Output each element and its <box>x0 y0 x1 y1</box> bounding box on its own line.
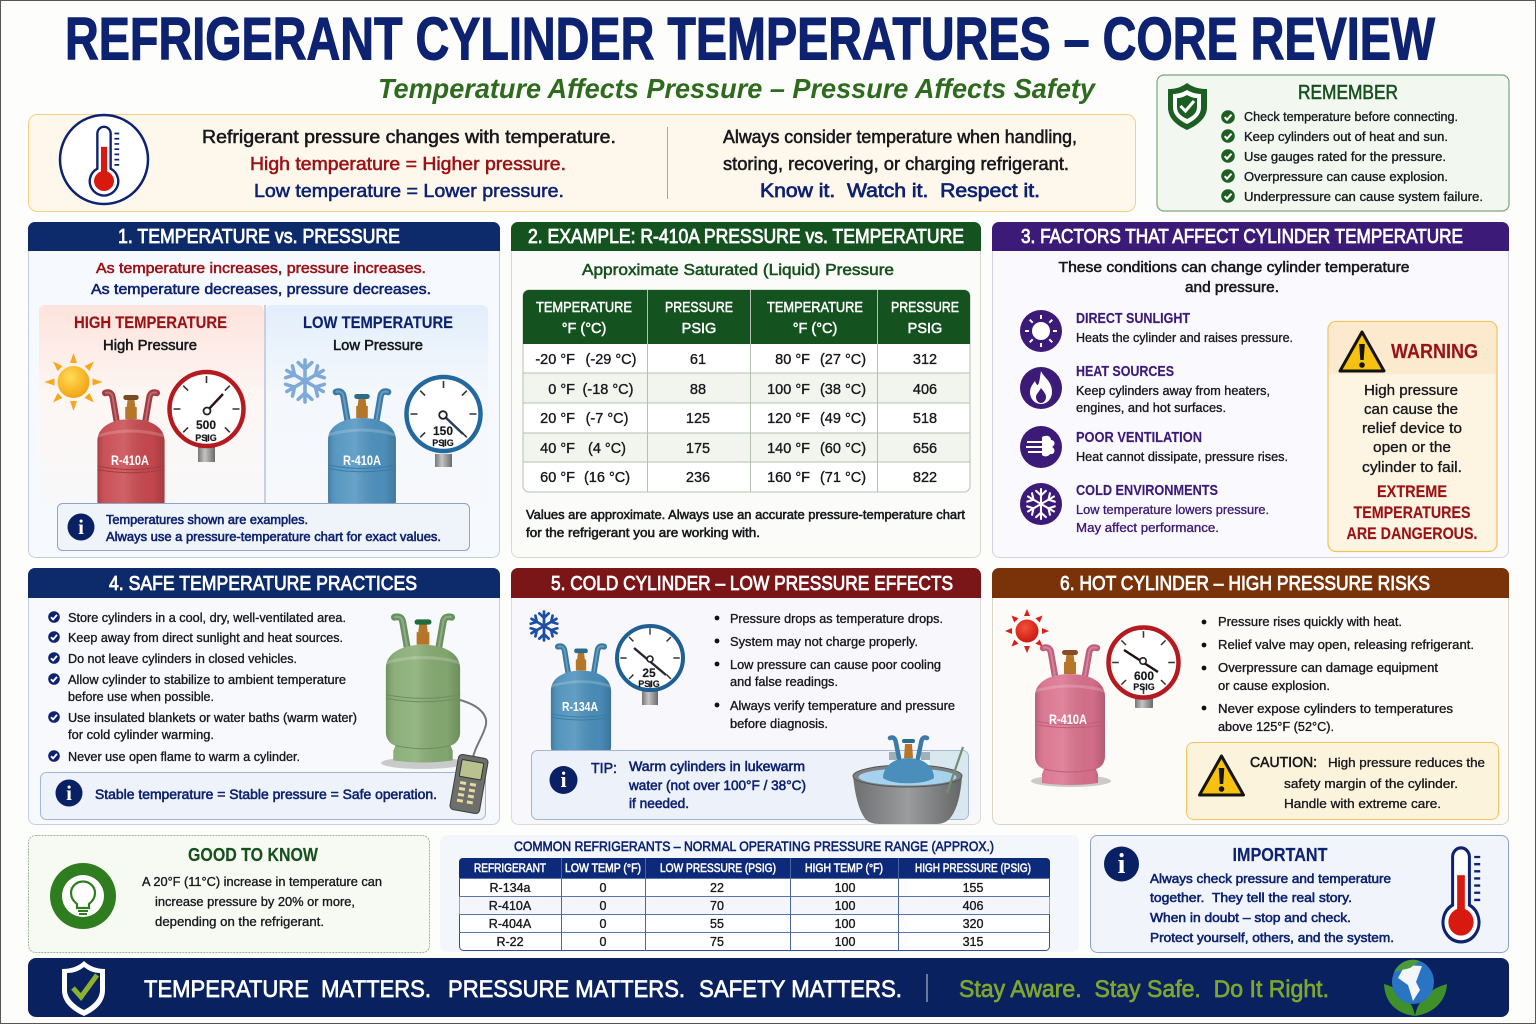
cylinder: red R-410A: R-410A <box>111 452 149 468</box>
cold bullet list: Pressure drops as temperature drops. <box>730 611 943 626</box>
pressure temperature table: 236 <box>686 470 710 486</box>
cold bullet list: before diagnosis. <box>730 716 828 731</box>
practices checklist: Do not leave cylinders in closed vehicles. <box>68 651 297 666</box>
refrigerants table: 0 <box>600 935 607 949</box>
pressure temperature table: TEMPERATURE <box>536 300 632 316</box>
pressure temperature table: (38 °C) <box>820 382 866 398</box>
factor: heat sources: engines, and hot surfaces. <box>1076 400 1226 415</box>
pressure temperature table: (49 °C) <box>820 411 866 427</box>
table footnote <box>526 507 965 540</box>
note: examples: Always use a pressure-temperature chart for exact values. <box>106 530 441 544</box>
callout: warning: EXTREME <box>1377 483 1447 501</box>
pressure temperature table: 40 °F <box>540 441 575 457</box>
pressure temperature table: (27 °C) <box>820 352 866 368</box>
refrigerants table: 406 <box>963 899 983 913</box>
header: panel 6: 6. HOT CYLINDER – HIGH PRESSURE RISKS <box>1060 573 1430 595</box>
callout: warning <box>1328 322 1497 552</box>
icon: warning triangle <box>1340 332 1384 371</box>
refrigerants table: 0 <box>600 899 607 913</box>
intro right text: Know it. Watch it. Respect it. <box>760 181 1040 202</box>
low temperature column: LOW TEMPERATURE <box>303 313 453 332</box>
panel: common refrigerants table <box>440 835 1079 952</box>
cylinder: blue R-134A: R-134A <box>562 699 598 714</box>
refrigerants table: 315 <box>963 935 983 949</box>
refrigerants table: REFRIGERANT <box>474 863 546 875</box>
intro left text: Refrigerant pressure changes with temperature. <box>202 127 616 147</box>
pressure temperature table: (71 °C) <box>820 470 866 486</box>
panel 3 intro: and pressure. <box>1185 279 1279 296</box>
refrigerants table: HIGH TEMP (°F) <box>805 863 883 875</box>
pressure temperature table: 140 °F <box>767 441 810 457</box>
intro left text <box>202 127 616 201</box>
pressure temperature table: 61 <box>690 352 706 368</box>
callout: caution: CAUTION: <box>1250 755 1317 771</box>
cylinder: pink R-410A: R-410A <box>1049 711 1087 727</box>
banner: footer <box>28 958 1509 1017</box>
refrigerants table: R-404A <box>489 917 532 931</box>
panel: 6 hot cylinder <box>992 568 1509 824</box>
refrigerants table: LOW PRESSURE (PSIG) <box>660 863 776 875</box>
pressure temperature table: (-7 °C) <box>586 411 628 427</box>
icon: red sun <box>1005 609 1049 653</box>
panel: 1 temperature vs pressure <box>28 222 500 558</box>
gauge: 25 PSIG: PSIG <box>638 679 660 689</box>
pressure temperature table: 822 <box>913 470 937 486</box>
intro right text: storing, recovering, or charging refrigerant. <box>723 154 1069 174</box>
pressure temperature table: (4 °C) <box>588 441 626 457</box>
tip box: Warm cylinders in lukewarm <box>629 759 805 774</box>
tip box: i <box>560 767 567 792</box>
high temperature column: HIGH TEMPERATURE <box>74 313 227 332</box>
cold bullet list: Always verify temperature and pressure <box>730 698 955 713</box>
remember checklist: Use gauges rated for the pressure. <box>1244 149 1446 164</box>
icon: caution triangle <box>1200 756 1244 795</box>
header: panel 3 <box>992 222 1509 251</box>
note: examples <box>58 504 470 550</box>
pressure temperature table <box>523 290 970 492</box>
remember checklist: Keep cylinders out of heat and sun. <box>1244 129 1448 144</box>
header: panel 1 <box>28 222 500 251</box>
high temperature column <box>39 305 264 530</box>
gauge: 600 PSIG: PSIG <box>1133 682 1155 692</box>
high temperature column: High Pressure <box>103 337 197 354</box>
callout: warning: ARE DANGEROUS. <box>1346 525 1478 543</box>
header: panel 4 <box>28 568 500 598</box>
practices checklist: Keep away from direct sunlight and heat sources. <box>68 630 343 645</box>
cylinder: blue R-410A: R-410A <box>343 452 381 468</box>
callout: warning: cylinder to fail. <box>1362 459 1462 476</box>
refrigerants table: 75 <box>710 935 724 949</box>
refrigerants table: 22 <box>710 881 724 895</box>
pressure temperature table: 160 °F <box>767 470 810 486</box>
note: stable temperature <box>40 772 486 820</box>
gauge: 600 PSIG: 600 <box>1134 669 1154 683</box>
header: panel 5: 5. COLD CYLINDER – LOW PRESSURE EFFECTS <box>551 573 953 595</box>
cold bullet list: and false readings. <box>730 674 838 689</box>
refrigerants table: R-134a <box>490 881 531 895</box>
remember checklist: Check temperature before connecting. <box>1244 109 1458 124</box>
header: panel 5 <box>511 568 981 598</box>
intro right text: Always consider temperature when handling, <box>723 127 1077 147</box>
header: panel 4: 4. SAFE TEMPERATURE PRACTICES <box>109 573 417 595</box>
pressure temperature table: (-29 °C) <box>586 352 636 368</box>
refrigerants table: R-410A <box>489 899 532 913</box>
body text: depending on the refrigerant. <box>155 914 324 929</box>
cylinder: pink R-410A <box>1031 648 1111 787</box>
panel: intro <box>28 114 1136 212</box>
pressure temperature table: (60 °C) <box>820 441 866 457</box>
tip box: TIP: <box>591 760 617 777</box>
refrigerants table: 100 <box>835 935 855 949</box>
refrigerants table: 0 <box>600 917 607 931</box>
pressure temperature table: 518 <box>913 411 937 427</box>
gauge: 150 PSIG: 150 <box>433 424 453 438</box>
table footnote: for the refrigerant you are working with. <box>526 525 760 540</box>
body text: Always check pressure and temperature <box>1150 871 1391 886</box>
callout: caution <box>1186 742 1498 820</box>
pressure temperature table: (16 °C) <box>584 470 630 486</box>
header: panel 1: 1. TEMPERATURE vs. PRESSURE <box>118 226 400 248</box>
remember checklist: Overpressure can cause explosion. <box>1244 169 1448 184</box>
note: examples: Temperatures shown are examples. <box>106 513 308 527</box>
subtitle: Temperature Affects Pressure – Pressure Affects Safety <box>378 73 1096 104</box>
icon: thermometer <box>1443 848 1480 942</box>
factor: heat sources <box>1020 364 1270 415</box>
pressure temperature table: 88 <box>690 382 706 398</box>
low temperature column <box>266 305 488 529</box>
hot bullet list: or cause explosion. <box>1218 678 1330 693</box>
cylinder: green <box>381 617 465 769</box>
gauge: 500 PSIG <box>170 372 244 462</box>
panel: important <box>1090 836 1508 952</box>
table subtitle: Approximate Saturated (Liquid) Pressure <box>582 262 894 279</box>
body text: When in doubt – stop and check. <box>1150 910 1351 925</box>
refrigerants table: 70 <box>710 899 724 913</box>
factor: direct sunlight <box>1020 310 1293 352</box>
refrigerants table: 100 <box>835 899 855 913</box>
pressure temperature table: °F (°C) <box>793 321 837 337</box>
icon: snowflake <box>283 360 327 402</box>
body text: increase pressure by 20% or more, <box>155 894 355 909</box>
pressure temperature table: TEMPERATURE <box>767 300 863 316</box>
banner message: PRESSURE MATTERS. <box>448 976 685 1003</box>
factor: poor ventilation: Heat cannot dissipate, pressure rises. <box>1076 449 1288 464</box>
refrigerants table: 100 <box>835 917 855 931</box>
practices checklist: Store cylinders in a cool, dry, well-ventilated area. <box>68 610 346 625</box>
panel: 3 factors <box>992 222 1509 558</box>
pressure temperature table: 656 <box>913 441 937 457</box>
factor: cold environments: COLD ENVIRONMENTS <box>1076 483 1218 499</box>
refrigerants table <box>459 858 1050 951</box>
body text <box>142 874 382 929</box>
pressure temperature table: 20 °F <box>540 411 575 427</box>
note: stable temperature: i <box>66 781 72 805</box>
banner message: TEMPERATURE MATTERS. <box>144 976 431 1003</box>
cold bullet list: System may not charge properly. <box>730 634 918 649</box>
cold bullet list: Low pressure can cause poor cooling <box>730 657 941 672</box>
hot bullet list: Overpressure can damage equipment <box>1218 660 1438 675</box>
icon: info <box>1104 846 1139 882</box>
panel: 4 safe practices <box>28 568 500 824</box>
tip box <box>532 750 968 820</box>
gauge: 600 PSIG <box>1108 628 1178 708</box>
panel: remember <box>1157 75 1509 211</box>
pressure temperature table: 60 °F <box>540 470 575 486</box>
pressure temperature table: (-18 °C) <box>583 382 633 398</box>
panel: 2 R-410A example <box>511 222 981 558</box>
pressure temperature table: 80 °F <box>775 352 810 368</box>
gauge: 25 PSIG: 25 <box>642 666 656 680</box>
factor: heat sources: Keep cylinders away from heaters, <box>1076 383 1270 398</box>
icon: shield <box>1168 83 1207 130</box>
factor: poor ventilation <box>1020 426 1288 468</box>
banner slogan: Stay Aware. Stay Safe. Do It Right. <box>959 976 1329 1003</box>
hot bullet list <box>1202 614 1474 734</box>
pressure temperature table: 0 °F <box>548 382 575 398</box>
body text: together. They tell the real story. <box>1150 890 1352 905</box>
practices checklist <box>48 610 357 764</box>
pressure temperature table: 175 <box>686 441 710 457</box>
factor: cold environments: May affect performance. <box>1076 520 1219 535</box>
factor: cold environments <box>1020 483 1269 535</box>
banner message: SAFETY MATTERS. <box>699 976 902 1003</box>
pressure temperature table: PSIG <box>908 321 942 337</box>
remember checklist: Underpressure can cause system failure. <box>1244 189 1483 204</box>
tip box: if needed. <box>629 796 689 811</box>
banner message <box>144 976 902 1003</box>
refrigerants table: HIGH PRESSURE (PSIG) <box>915 863 1031 875</box>
callout: warning: High pressure <box>1364 382 1458 399</box>
factor: poor ventilation: POOR VENTILATION <box>1076 430 1202 446</box>
intro left text: Low temperature = Lower pressure. <box>254 181 564 201</box>
callout: warning: TEMPERATURES <box>1354 504 1470 522</box>
cylinder: blue R-134A <box>551 646 611 773</box>
pressure temperature table: 406 <box>913 382 937 398</box>
panel 3 intro <box>1058 259 1410 296</box>
cold bullet list <box>715 611 955 731</box>
icon: light bulb <box>50 863 116 929</box>
body text <box>1150 871 1394 945</box>
panel 1 intro text <box>91 260 431 298</box>
callout: warning: relief device to <box>1362 420 1462 437</box>
icon: info: i <box>1118 849 1126 880</box>
practices checklist: Use insulated blankets or water baths (warm water) <box>68 710 357 725</box>
practices checklist: Never use open flame to warm a cylinder. <box>68 749 300 764</box>
icon: shield check <box>62 961 105 1016</box>
icon: globe with leaves <box>1384 960 1447 1016</box>
header: panel 2 <box>511 222 981 251</box>
pressure temperature table: 312 <box>913 352 937 368</box>
gauge: 150 PSIG: PSIG <box>432 438 454 448</box>
practices checklist: Allow cylinder to stabilize to ambient temperature <box>68 672 346 687</box>
practices checklist: for cold cylinder warming. <box>68 727 214 742</box>
tip box: water (not over 100°F / 38°C) <box>628 778 806 793</box>
body text: Protect yourself, others, and the system. <box>1150 930 1394 945</box>
hot bullet list: Relief valve may open, releasing refrigerant. <box>1218 637 1474 652</box>
callout: warning: can cause the <box>1364 401 1458 418</box>
practices checklist: before use when possible. <box>68 689 214 704</box>
heading: GOOD TO KNOW <box>188 845 318 865</box>
factor: heat sources: HEAT SOURCES <box>1076 364 1174 380</box>
refrigerants table: 155 <box>963 881 983 895</box>
pressure temperature table: 120 °F <box>767 411 810 427</box>
body text: A 20°F (11°C) increase in temperature can <box>142 874 382 889</box>
gauge: 500 PSIG: 500 <box>196 418 216 432</box>
intro right text <box>723 127 1077 202</box>
refrigerants table: LOW TEMP (°F) <box>565 863 641 875</box>
icon: snowflake <box>529 612 559 640</box>
pressure temperature table: °F (°C) <box>562 321 606 337</box>
digital meter and hose <box>449 700 489 814</box>
water bath tub <box>853 738 963 824</box>
hot bullet list: Never expose cylinders to temperatures <box>1218 701 1453 716</box>
panel 1 intro text: As temperature decreases, pressure decreases. <box>91 281 431 298</box>
gauge: 25 PSIG <box>617 626 683 705</box>
panel 1 intro text: As temperature increases, pressure increases. <box>96 260 426 277</box>
pressure temperature table: PRESSURE <box>891 300 959 316</box>
header: panel 6 <box>992 568 1509 598</box>
icon: thermometer <box>60 115 148 204</box>
note: examples: i <box>78 515 84 539</box>
cylinder: blue R-410A <box>328 392 396 529</box>
note: stable temperature: Stable temperature = Stable pressure = Safe operation. <box>95 787 437 802</box>
factor: cold environments: Low temperature lowers pressure. <box>1076 502 1269 517</box>
gauge: 500 PSIG: PSIG <box>195 433 217 443</box>
header: panel 3: 3. FACTORS THAT AFFECT CYLINDER TEMPERATURE <box>1021 226 1463 248</box>
hot bullet list: above 125°F (52°C). <box>1218 719 1334 734</box>
remember checklist <box>1221 109 1483 204</box>
callout: caution: safety margin of the cylinder. <box>1284 776 1458 791</box>
icon: sun <box>44 353 102 411</box>
pressure temperature table: PRESSURE <box>665 300 733 316</box>
low temperature column: Low Pressure <box>333 337 423 354</box>
table title: COMMON REFRIGERANTS – NORMAL OPERATING PRESSURE RANGE (APPROX.) <box>514 838 994 854</box>
refrigerants table: 100 <box>835 881 855 895</box>
gauge: 150 PSIG <box>406 377 480 467</box>
pressure temperature table: 100 °F <box>767 382 810 398</box>
header: panel 2: 2. EXAMPLE: R-410A PRESSURE vs. TEMPERATURE <box>528 226 964 248</box>
remember heading: REMEMBER <box>1298 82 1398 104</box>
heading: IMPORTANT <box>1232 845 1328 865</box>
panel: good to know <box>28 836 430 952</box>
table footnote: Values are approximate. Always use an accurate pressure-temperature chart <box>526 507 965 522</box>
refrigerants table: R-22 <box>496 935 524 949</box>
intro left text: High temperature = Higher pressure. <box>250 154 566 174</box>
panel 3 intro: These conditions can change cylinder temperature <box>1058 259 1410 276</box>
factor: direct sunlight: Heats the cylinder and raises pressure. <box>1076 330 1293 345</box>
panel: 5 cold cylinder <box>511 568 981 824</box>
pressure temperature table: 125 <box>686 411 710 427</box>
cylinder: red R-410A <box>97 393 165 530</box>
callout: caution: High pressure reduces the <box>1328 755 1485 770</box>
pressure temperature table: PSIG <box>682 321 716 337</box>
callout: warning: WARNING <box>1391 341 1478 363</box>
refrigerants table: 320 <box>963 917 983 931</box>
hot bullet list: Pressure rises quickly with heat. <box>1218 614 1402 629</box>
callout: warning: open or the <box>1373 439 1451 456</box>
callout: caution: Handle with extreme care. <box>1284 796 1441 811</box>
pressure temperature table: -20 °F <box>535 352 575 368</box>
refrigerants table: 55 <box>710 917 724 931</box>
refrigerants table: 0 <box>600 881 607 895</box>
factor: direct sunlight: DIRECT SUNLIGHT <box>1076 311 1190 327</box>
